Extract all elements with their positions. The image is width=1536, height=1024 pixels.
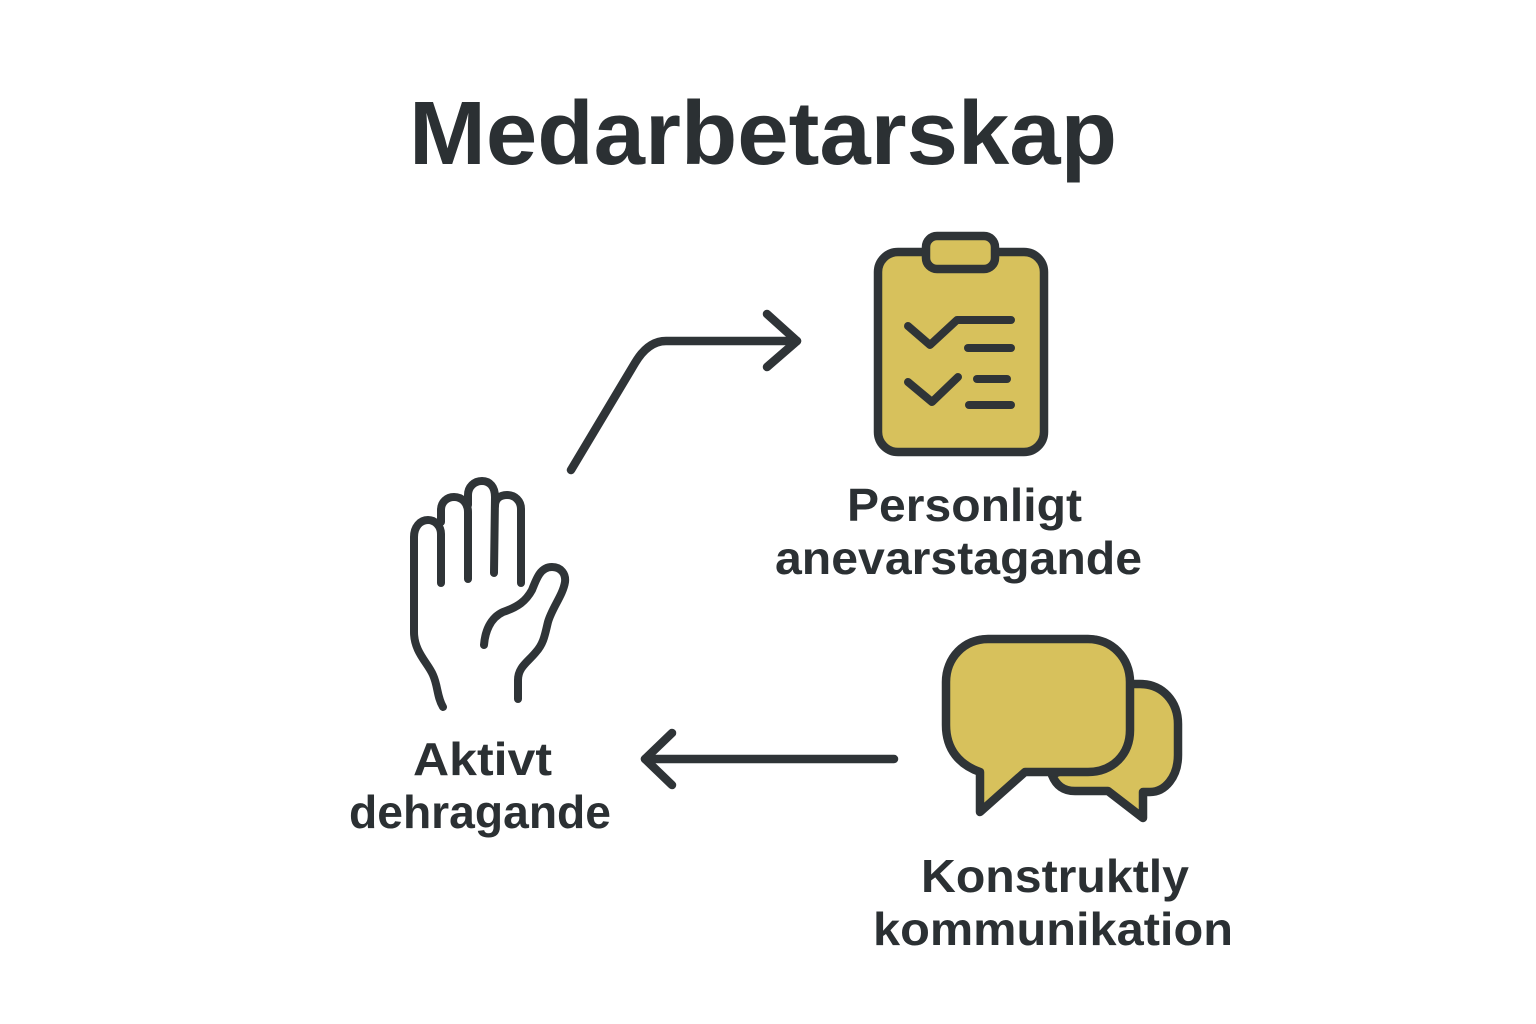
arrow: from speech bubbles to hand: [645, 733, 894, 785]
label: Aktivt dehragande: Aktivt: [413, 733, 552, 785]
label: Personligt anevarstagande: Personligt: [847, 479, 1082, 531]
icon: speech bubbles: [946, 639, 1178, 818]
label: Personligt anevarstagande: anevarstagande: [775, 532, 1142, 584]
title: Medarbetarskap: [409, 84, 1117, 184]
label: Konstruktly kommunikation: kommunikation: [873, 903, 1233, 955]
icon: clipboard with checklist: [878, 236, 1044, 452]
label: Personligt anevarstagande: [775, 479, 1142, 584]
label: Aktivt dehragande: dehragande: [349, 786, 611, 838]
label: Konstruktly kommunikation: Konstruktly: [921, 850, 1189, 902]
label: Aktivt dehragande: [349, 733, 611, 838]
label: Konstruktly kommunikation: [873, 850, 1233, 955]
icon: raised hand: [414, 481, 565, 707]
arrow: from hand to clipboard: [571, 314, 797, 470]
